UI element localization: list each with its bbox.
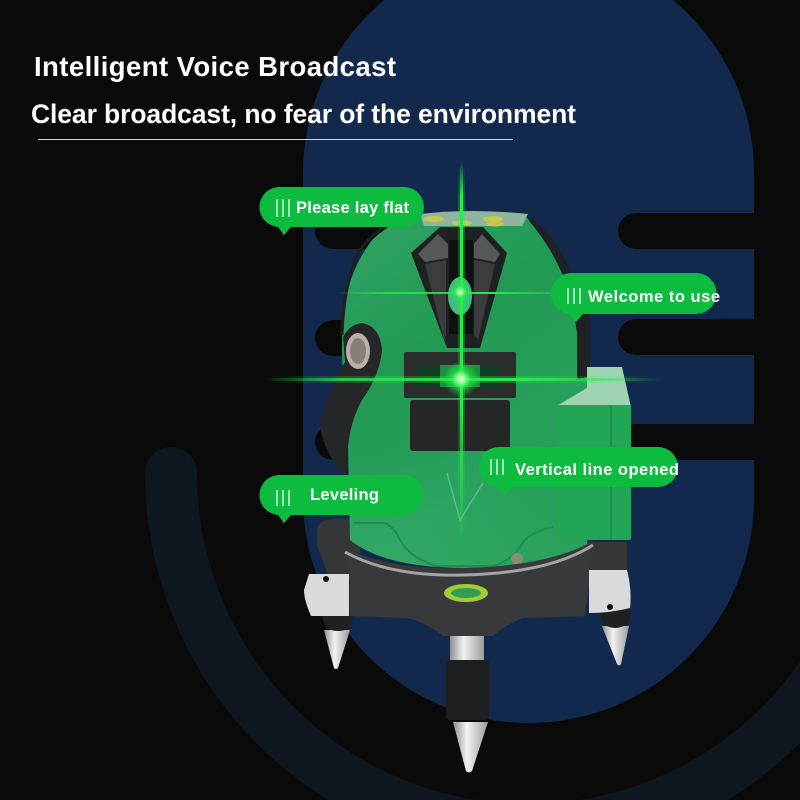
side battery box [555, 367, 631, 540]
title: Intelligent Voice Broadcast [34, 51, 396, 82]
icon: sound bars [491, 459, 503, 475]
bubble: please lay flat [259, 187, 424, 235]
bubble: welcome to use [551, 273, 720, 322]
icon: sound bars [568, 288, 580, 304]
lower laser window [404, 352, 516, 398]
dome strap left edge [342, 212, 420, 335]
microphone grille bars [315, 213, 754, 460]
microphone capsule [303, 0, 754, 723]
bubble: welcome to use: Welcome to use [588, 288, 720, 306]
product: laser level [304, 211, 632, 772]
base plate [345, 541, 593, 636]
rubber pad [410, 400, 510, 451]
laser lines [264, 160, 662, 535]
adjustment knobs [304, 570, 631, 616]
rear base lobes [317, 518, 627, 575]
tripod feet [320, 610, 632, 772]
dome strap right edge [525, 214, 590, 380]
front laser window [411, 227, 507, 348]
main body [342, 214, 587, 568]
screw [511, 553, 523, 565]
icon: sound bars [277, 490, 289, 506]
rim detail [353, 523, 553, 566]
icon: sound bars [277, 199, 289, 217]
bubble: vertical line opened [479, 447, 679, 495]
bubble: vertical line opened: Vertical line opened [515, 461, 679, 479]
subtitle: Clear broadcast, no fear of the environment [31, 99, 576, 129]
microphone stand arc [171, 473, 800, 800]
body V seam [447, 473, 483, 520]
top panel with buttons [420, 211, 528, 226]
left strap [320, 323, 382, 478]
bubble: leveling: Leveling [310, 486, 379, 504]
bubble: leveling [259, 475, 424, 523]
lower body highlight [348, 450, 587, 568]
bubble: please lay flat: Please lay flat [296, 199, 410, 217]
